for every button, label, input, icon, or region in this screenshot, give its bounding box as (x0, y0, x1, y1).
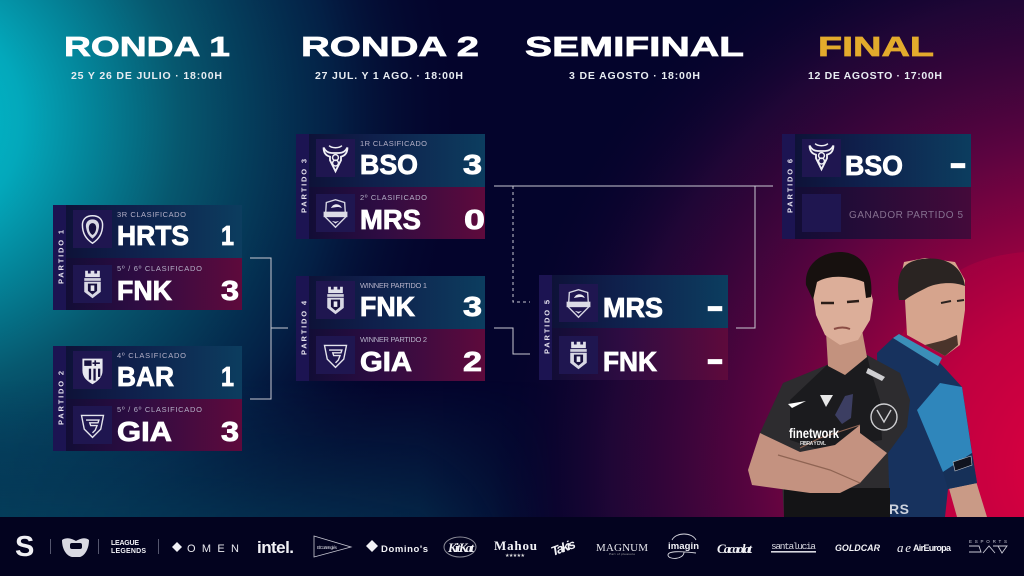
logo: Takis: Takis (549, 536, 578, 559)
match card: partido 6 final: – (951, 148, 965, 179)
match card: partido 1 (53, 205, 242, 310)
team logo: BSO (802, 139, 841, 177)
logo: Imagin (668, 534, 699, 558)
heading: Semifinal: 3 DE AGOSTO · 18:00H (569, 70, 700, 82)
team logo: GIA (316, 336, 355, 374)
match card: partido 4: PARTIDO 4 (300, 300, 308, 355)
player: left, black jersey: finetwork (789, 426, 839, 441)
logo: KitKat (444, 537, 476, 557)
match card: partido 3: MRS (360, 204, 421, 235)
player: left, black jersey (748, 252, 910, 517)
match card: partido 3: BSO (360, 149, 418, 180)
match card: partido 5: MRS (603, 292, 663, 323)
logo: League of Legends: LEGENDS (111, 548, 146, 555)
match card: partido 4: GIA (360, 346, 412, 377)
match card: partido 4: 2 (463, 346, 482, 377)
match card: partido 2: GIA (117, 416, 172, 447)
match card: partido 1: PARTIDO 1 (56, 230, 66, 284)
heading: Final: FINAL (818, 31, 934, 62)
match card: partido 1: 5º / 6º CLASIFICADO (117, 264, 202, 273)
match card: partido 1: 1 (221, 220, 234, 251)
logo: Esports Data (969, 539, 1007, 553)
logo: League of Legends (111, 540, 146, 555)
heading: Final: 12 DE AGOSTO · 17:00H (808, 70, 942, 82)
match card: partido 1: HRTS (117, 220, 189, 251)
match card: partido 5: FNK (603, 346, 657, 377)
logo: Omen: OMEN (187, 543, 239, 555)
heading: Ronda 2 (301, 31, 479, 82)
heading: Ronda 1: 25 Y 26 DE JULIO · 18:00H (71, 70, 222, 82)
bracket connector: partido 3 winner to final (494, 186, 773, 328)
match card: partido 4: FNK (360, 291, 415, 322)
team logo: FNK (559, 336, 598, 374)
logo: El Corte Ingles (314, 536, 351, 557)
player: right, blue jersey: RS (889, 501, 909, 517)
match card: partido 2: BAR (117, 361, 174, 392)
logo: El Corte Ingles: ElCorteInglés (317, 545, 338, 550)
logo: Dominos: Domino's (381, 544, 428, 555)
match card: partido 4: WINNER PARTIDO 1 (360, 281, 427, 290)
match card: partido 3 (296, 134, 485, 239)
match card: partido 3: 3 (463, 149, 482, 180)
player photos (748, 252, 987, 517)
match card: partido 2: 1 (221, 361, 234, 392)
match card: partido 3: 0 (464, 204, 485, 235)
logo: KitKat: KitKat (447, 540, 474, 555)
logo: Magnum: MAGNUM (596, 542, 648, 554)
logo: Intel: intel. (257, 538, 294, 557)
match card: partido 1: 3 (221, 275, 239, 306)
logo: Magnum: Part of pleasure (609, 552, 635, 556)
match card: partido 1: 3R CLASIFICADO (117, 210, 186, 219)
match card: partido 2: PARTIDO 2 (56, 371, 66, 425)
match card: partido 3: 1R CLASIFICADO (360, 139, 427, 148)
empty logo placeholder (802, 194, 841, 232)
player: right, blue jersey (877, 258, 987, 517)
match card: partido 4: 3 (463, 291, 482, 322)
logo: Air Europa: AirEuropa (913, 543, 952, 553)
logo: Dominos (366, 540, 428, 555)
logo: Mahou: Mahou (494, 538, 537, 553)
team logo: GIA (73, 406, 112, 444)
match card: partido 2: 3 (221, 416, 239, 447)
heading: Semifinal: SEMIFINAL (525, 31, 744, 62)
match card: partido 6 final: BSO (845, 150, 903, 181)
logo: Superliga S: S (15, 531, 34, 563)
match card: partido 4 (296, 276, 485, 381)
team logo: FNK (316, 281, 355, 319)
heading: Ronda 1 (64, 31, 230, 82)
team logo: HRTS (73, 210, 112, 248)
match card: partido 2: 5º / 6º CLASIFICADO (117, 405, 202, 414)
team logo: BSO (316, 139, 355, 177)
pending team label: GANADOR PARTIDO 5 (849, 210, 963, 221)
match card: partido 5 (539, 275, 728, 380)
team logo: FNK (73, 265, 112, 303)
logo: Esports Data: ESPORTS (969, 539, 1007, 544)
bracket connector: partido 4 to partido 5 (494, 328, 530, 354)
bracket connector: round 1 to partido 4 (250, 258, 288, 399)
bracket connector: partido 3 loser dashed to partido 5 (513, 186, 530, 302)
logo: Air Europa (897, 540, 952, 555)
match card: partido 2 (53, 346, 242, 451)
match card: partido 3: PARTIDO 3 (300, 159, 308, 213)
team logo: BAR (73, 351, 112, 389)
logo: Imagin: imagin (668, 541, 699, 552)
match card: partido 6 final (782, 134, 971, 239)
heading: Final (808, 31, 942, 82)
team logo: MRS (559, 284, 598, 322)
logo: LVP (62, 538, 89, 557)
match card: partido 5: – (708, 291, 722, 322)
match card: partido 6 final: PARTIDO 6 (786, 159, 794, 213)
logo: Santalucia: santalucia (771, 541, 816, 552)
match card: partido 3: 2º CLASIFICADO (360, 193, 427, 202)
logo: League of Legends: LEAGUE (111, 540, 139, 547)
heading: Semifinal (525, 31, 744, 82)
logo: Goldcar: GOLDCAR (835, 543, 880, 554)
sponsor bar (0, 517, 1024, 576)
match card: partido 4: WINNER PARTIDO 2 (360, 335, 427, 344)
heading: Ronda 2: 27 JUL. Y 1 AGO. · 18:00H (315, 70, 463, 82)
heading: Ronda 2: RONDA 2 (301, 31, 479, 62)
player: left, black jersey: FIBRA Y DVL (800, 441, 826, 447)
match card: partido 5: PARTIDO 5 (542, 300, 552, 354)
match card: partido 5: – (708, 344, 722, 375)
team logo: MRS (316, 194, 355, 232)
logo: Cacaolat: Cacaolat (717, 541, 752, 556)
match card: partido 1: FNK (117, 275, 172, 306)
match card: partido 2: 4º CLASIFICADO (117, 351, 186, 360)
logo: Mahou: ★★★★★ (505, 553, 526, 559)
logo: Air Europa: ae (897, 540, 911, 555)
heading: Ronda 1: RONDA 1 (64, 31, 230, 62)
